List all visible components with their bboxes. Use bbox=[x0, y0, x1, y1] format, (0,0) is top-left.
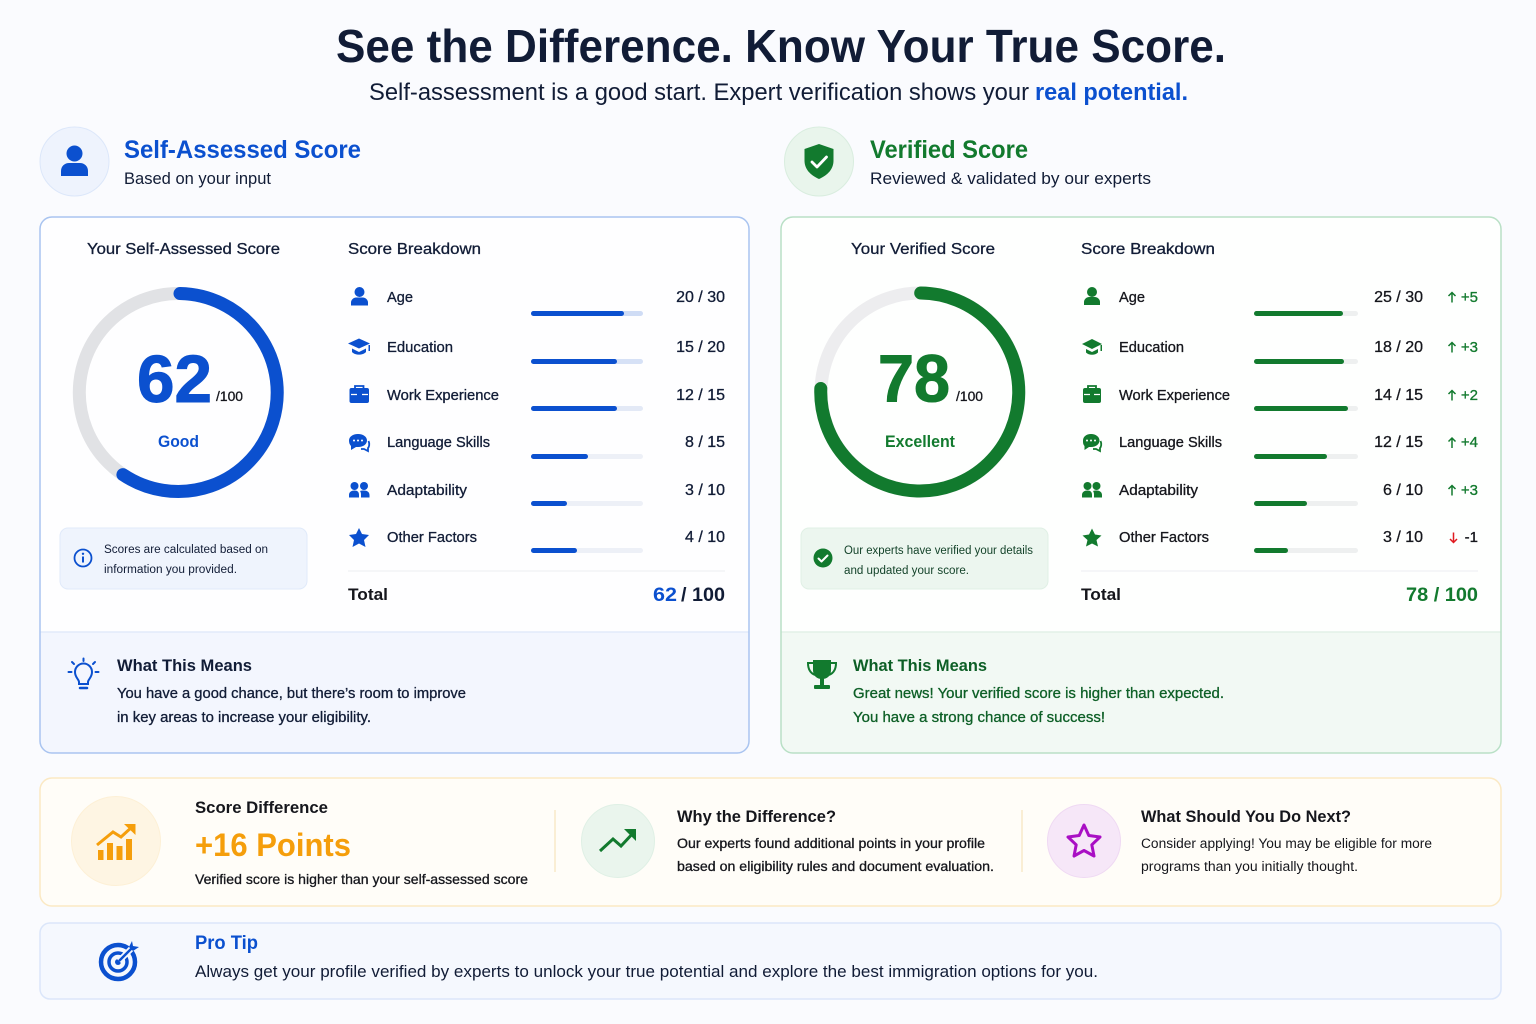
row: work experience: +2 bbox=[1461, 387, 1478, 404]
icon: person bbox=[1084, 287, 1100, 305]
why the difference text bbox=[677, 807, 994, 874]
row: age bbox=[1084, 287, 1478, 316]
row: other factors: Other Factors bbox=[1119, 530, 1209, 546]
verified note bbox=[801, 528, 1048, 589]
what should you do next text: Consider applying! You may be eligible for more bbox=[1141, 836, 1432, 851]
row: language skills: Language Skills bbox=[1119, 435, 1222, 451]
row: total bbox=[348, 584, 725, 606]
gauge: 78 of 100 bbox=[821, 293, 1019, 491]
row: education bbox=[1082, 339, 1478, 364]
row: work experience: Work Experience bbox=[1119, 388, 1230, 404]
icon: outlined star bbox=[1048, 804, 1120, 878]
row: work experience bbox=[1083, 386, 1478, 411]
icon: check circle bbox=[814, 548, 832, 568]
what this means text: What This Means bbox=[853, 657, 987, 675]
row: total: Total bbox=[348, 585, 388, 604]
icon: briefcase bbox=[350, 386, 369, 403]
gauge: 78 of 100: /100 bbox=[956, 388, 983, 404]
row: adaptability bbox=[349, 482, 725, 506]
row: other factors: -1 bbox=[1465, 529, 1478, 546]
row: adaptability: 3 / 10 bbox=[685, 482, 725, 499]
row: adaptability bbox=[1082, 482, 1478, 506]
what should you do next text: What Should You Do Next? bbox=[1141, 807, 1351, 826]
gauge: 62 of 100: Good bbox=[158, 433, 199, 451]
what this means text: in key areas to increase your eligibility. bbox=[117, 710, 371, 726]
verified note: Our experts have verified your details bbox=[844, 545, 1033, 557]
gauge: 62 of 100 bbox=[79, 294, 277, 492]
heading: self-assessed score: Self-Assessed Score bbox=[124, 136, 361, 164]
panel: pro tip bbox=[40, 923, 1501, 999]
subheading: reviewed and validated: Reviewed & validated by our experts bbox=[870, 170, 1151, 188]
icon: briefcase bbox=[1083, 386, 1101, 403]
gauge: 78 of 100: Excellent bbox=[885, 433, 955, 451]
why the difference text: based on eligibility rules and document evaluation. bbox=[677, 859, 994, 874]
row: age: +5 bbox=[1461, 289, 1478, 306]
row: other factors: Other Factors bbox=[387, 530, 477, 546]
breakdown heading: Score Breakdown bbox=[1081, 241, 1215, 258]
row: age: Age bbox=[1119, 290, 1145, 306]
row: total: / 100 bbox=[681, 584, 725, 606]
row: age bbox=[351, 287, 725, 316]
breakdown heading: Score Breakdown bbox=[348, 241, 481, 258]
pro tip text bbox=[195, 933, 1098, 981]
icon: person bbox=[351, 287, 368, 306]
icon: two people bbox=[1082, 482, 1102, 498]
icon: two people bbox=[349, 482, 370, 498]
score difference text bbox=[195, 798, 528, 887]
row: language skills: Language Skills bbox=[387, 435, 490, 451]
row: other factors: 4 / 10 bbox=[685, 529, 725, 546]
row: language skills: 12 / 15 bbox=[1374, 434, 1423, 451]
icon: trend arrow bbox=[582, 804, 654, 878]
what this means text: Great news! Your verified score is higher than expected. bbox=[853, 686, 1224, 702]
icon: trophy bbox=[808, 660, 836, 689]
subheading: based on your input: Based on your input bbox=[124, 170, 271, 188]
row: language skills bbox=[1083, 434, 1478, 459]
icon: graduation cap bbox=[348, 338, 370, 355]
verified note: and updated your score. bbox=[844, 565, 969, 577]
why the difference text: Why the Difference? bbox=[677, 807, 836, 826]
what this means text: You have a strong chance of success! bbox=[853, 710, 1105, 726]
row: work experience: Work Experience bbox=[387, 388, 499, 404]
icon: chat bubbles bbox=[349, 434, 369, 451]
subtitle: Self-assessment is a good start. Expert verification shows your bbox=[369, 79, 1029, 106]
why the difference text: Our experts found additional points in your profile bbox=[677, 836, 985, 851]
row: language skills bbox=[349, 434, 725, 459]
footer band: what this means bbox=[781, 632, 1501, 753]
score difference text: Verified score is higher than your self-assessed score bbox=[195, 871, 528, 887]
what this means text bbox=[853, 657, 1224, 726]
icon: rising bars bbox=[72, 796, 160, 886]
row: age: 25 / 30 bbox=[1374, 289, 1423, 306]
gauge: 78 of 100: 78 bbox=[878, 342, 950, 416]
what this means text: What This Means bbox=[117, 657, 252, 675]
icon: target bbox=[101, 941, 139, 979]
score difference text: +16 Points bbox=[195, 827, 351, 863]
row: adaptability: Adaptability bbox=[1119, 483, 1199, 499]
icon: info bbox=[74, 550, 92, 566]
header: verified score bbox=[784, 127, 1151, 196]
gauge: 62 of 100: /100 bbox=[216, 388, 243, 404]
row: age: Age bbox=[387, 290, 413, 306]
row: work experience bbox=[350, 386, 725, 411]
panel: verified score bbox=[781, 217, 1501, 753]
icon: graduation cap bbox=[1082, 339, 1102, 355]
row: adaptability: 6 / 10 bbox=[1383, 482, 1423, 499]
row: work experience: 12 / 15 bbox=[676, 387, 725, 404]
row: language skills: 8 / 15 bbox=[685, 434, 725, 451]
info note bbox=[60, 528, 307, 589]
info note: information you provided. bbox=[104, 564, 237, 576]
panel: self-assessed score bbox=[40, 217, 749, 753]
panel: score difference strip bbox=[40, 778, 1501, 906]
row: adaptability: +3 bbox=[1461, 482, 1478, 499]
row: other factors bbox=[1082, 528, 1478, 553]
what this means text bbox=[117, 657, 466, 726]
icon: chat bubbles bbox=[1083, 434, 1101, 451]
icon: star bbox=[1082, 528, 1102, 546]
row: other factors: 3 / 10 bbox=[1383, 529, 1423, 546]
icon: light bulb bbox=[68, 658, 98, 688]
row: work experience: 14 / 15 bbox=[1374, 387, 1423, 404]
row: education: 15 / 20 bbox=[676, 339, 725, 356]
what should you do next text bbox=[1141, 807, 1432, 874]
gauge: 62 of 100: 62 bbox=[137, 342, 212, 417]
row: total: 78 / 100 bbox=[1406, 584, 1478, 606]
score difference text: Score Difference bbox=[195, 798, 328, 817]
row: total: 62 bbox=[653, 584, 677, 606]
row: language skills: +4 bbox=[1461, 434, 1478, 451]
what should you do next text: programs than you initially thought. bbox=[1141, 859, 1358, 874]
footer band: what this means bbox=[40, 632, 749, 753]
row: education bbox=[348, 338, 725, 364]
row: education: +3 bbox=[1461, 339, 1478, 356]
title: See the Difference. Know Your True Score. bbox=[336, 20, 1226, 72]
row: total: Total bbox=[1081, 585, 1121, 604]
what this means text: You have a good chance, but there’s room to improve bbox=[117, 686, 466, 702]
gauge heading: Your Self-Assessed Score bbox=[87, 241, 280, 258]
row: education: Education bbox=[387, 340, 453, 356]
info note: Scores are calculated based on bbox=[104, 544, 268, 556]
icon: shield badge bbox=[784, 127, 854, 196]
icon: person badge bbox=[40, 127, 109, 196]
row: total bbox=[1081, 584, 1478, 606]
row: adaptability: Adaptability bbox=[387, 483, 468, 499]
icon: star bbox=[349, 528, 369, 547]
row: education: Education bbox=[1119, 340, 1184, 356]
row: age: 20 / 30 bbox=[676, 289, 725, 306]
row: other factors bbox=[349, 528, 725, 553]
subtitle: real potential. bbox=[1035, 79, 1188, 106]
gauge heading: Your Verified Score bbox=[851, 241, 995, 258]
row: education: 18 / 20 bbox=[1374, 339, 1423, 356]
header: self-assessed score bbox=[40, 127, 361, 196]
heading: verified score: Verified Score bbox=[870, 136, 1028, 164]
pro tip text: Always get your profile verified by experts to unlock your true potential and explore the best immigration options for you. bbox=[195, 963, 1098, 981]
pro tip text: Pro Tip bbox=[195, 933, 258, 954]
